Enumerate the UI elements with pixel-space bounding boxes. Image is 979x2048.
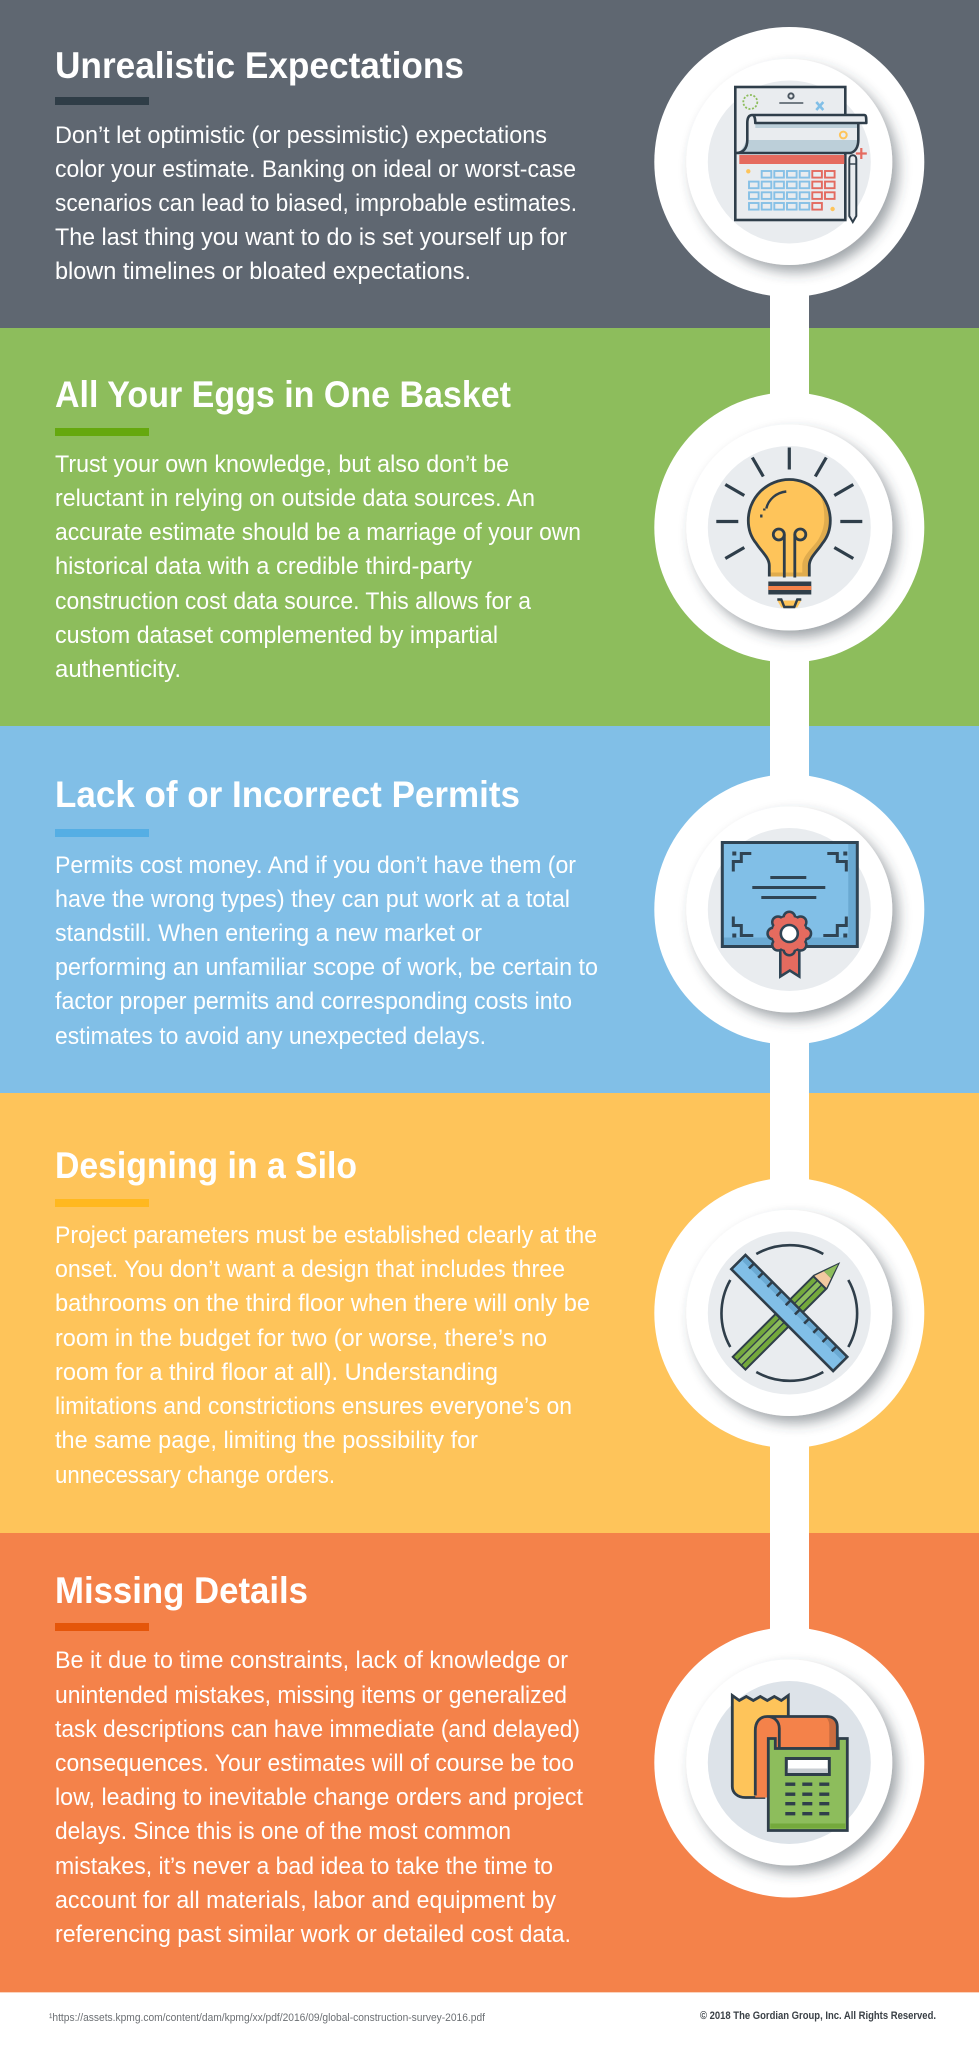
body text: construction cost data source. This allows for a — [55, 588, 532, 615]
panel: Unrealistic Expectations — [0, 0, 979, 328]
body text: unnecessary change orders. — [55, 1462, 335, 1489]
heading: Missing Details: Missing Details — [55, 1570, 308, 1611]
icon: calculator with receipt — [732, 1696, 847, 1830]
body text: historical data with a credible third-party — [55, 553, 472, 580]
heading accent bar — [55, 1623, 149, 1631]
body text: the same page, limiting the possibility for — [55, 1427, 478, 1454]
body text: have the wrong types) they can put work at a total — [55, 886, 570, 913]
body text: custom dataset complemented by impartial — [55, 622, 498, 649]
body text: unintended mistakes, missing items or generalized — [55, 1682, 567, 1709]
node 5: calculator and receipt — [654, 1628, 924, 1898]
heading: Lack of or Incorrect Permits: Lack of or Incorrect Permits — [55, 774, 520, 815]
icon: light bulb — [716, 448, 862, 608]
body text: estimates to avoid any unexpected delays. — [55, 1023, 486, 1050]
body text: authenticity. — [55, 656, 181, 683]
heading accent bar — [55, 1199, 149, 1207]
body text: Permits cost money. And if you don’t have them (or — [55, 852, 576, 879]
icon: certificate — [722, 842, 857, 976]
body text: bathrooms on the third floor when there will only be — [55, 1290, 590, 1317]
heading: Unrealistic Expectations: Unrealistic Expectations — [55, 45, 464, 86]
panel: Lack of or Incorrect Permits — [0, 726, 979, 1093]
node 1: calendar — [654, 27, 924, 297]
body text: scenarios can lead to biased, improbable estimates. — [55, 190, 577, 217]
body text: task descriptions can have immediate (and delayed) — [55, 1716, 580, 1743]
heading accent bar — [55, 428, 149, 436]
copyright notice: © 2018 The Gordian Group, Inc. All Rights Reserved. — [700, 2010, 936, 2022]
icon: crossed ruler and pencil — [721, 1245, 857, 1381]
body text — [55, 122, 577, 285]
node 4: ruler and pencil — [654, 1178, 924, 1448]
body text: reluctant in relying on outside data sources. An — [55, 485, 535, 512]
body text: color your estimate. Banking on ideal or worst-case — [55, 156, 576, 183]
footnote source: ¹https://assets.kpmg.com/content/dam/kpmg/xx/pdf/2016/09/global-construction-survey-2016.pdf — [49, 2012, 486, 2024]
body text: factor proper permits and corresponding costs into — [55, 988, 572, 1015]
body text: consequences. Your estimates will of course be too — [55, 1750, 574, 1777]
body text: low, leading to inevitable change orders and project — [55, 1784, 583, 1811]
body text — [55, 1222, 597, 1489]
body text — [55, 1647, 583, 1948]
body text: The last thing you want to do is set yourself up for — [55, 224, 567, 251]
body text: performing an unfamiliar scope of work, be certain to — [55, 954, 598, 981]
body text: room for a third floor at all). Understanding — [55, 1359, 498, 1386]
body text: limitations and constrictions ensures everyone’s on — [55, 1393, 572, 1420]
icon: calendar — [735, 87, 867, 222]
body text — [55, 451, 581, 683]
body text — [55, 852, 598, 1050]
body text: room in the budget for two (or worse, there’s no — [55, 1325, 547, 1352]
panel: Missing Details — [0, 1533, 979, 1992]
heading accent bar — [55, 97, 149, 105]
body text: mistakes, it’s never a bad idea to take the time to — [55, 1853, 553, 1880]
heading: All Your Eggs in One Basket: All Your Eggs in One Basket — [55, 374, 511, 415]
body text: delays. Since this is one of the most common — [55, 1818, 511, 1845]
body text: Be it due to time constraints, lack of knowledge or — [55, 1647, 568, 1674]
heading accent bar — [55, 829, 149, 837]
body text: blown timelines or bloated expectations. — [55, 258, 471, 285]
body text: accurate estimate should be a marriage of your own — [55, 519, 581, 546]
body text: onset. You don’t want a design that includes three — [55, 1256, 565, 1283]
footer divider — [0, 1992, 979, 1993]
vertical connector — [770, 162, 809, 1762]
heading: Designing in a Silo: Designing in a Silo — [55, 1145, 357, 1186]
body text: referencing past similar work or detailed cost data. — [55, 1921, 571, 1948]
body text: account for all materials, labor and equipment by — [55, 1887, 556, 1914]
body text: Trust your own knowledge, but also don’t be — [55, 451, 509, 478]
node 3: certificate — [654, 774, 924, 1044]
body text: Don’t let optimistic (or pessimistic) expectations — [55, 122, 547, 149]
panel: All Your Eggs in One Basket — [0, 328, 979, 726]
body text: standstill. When entering a new market or — [55, 920, 482, 947]
body text: Project parameters must be established clearly at the — [55, 1222, 597, 1249]
node 2: light bulb — [654, 392, 924, 662]
panel: Designing in a Silo — [0, 1093, 979, 1533]
